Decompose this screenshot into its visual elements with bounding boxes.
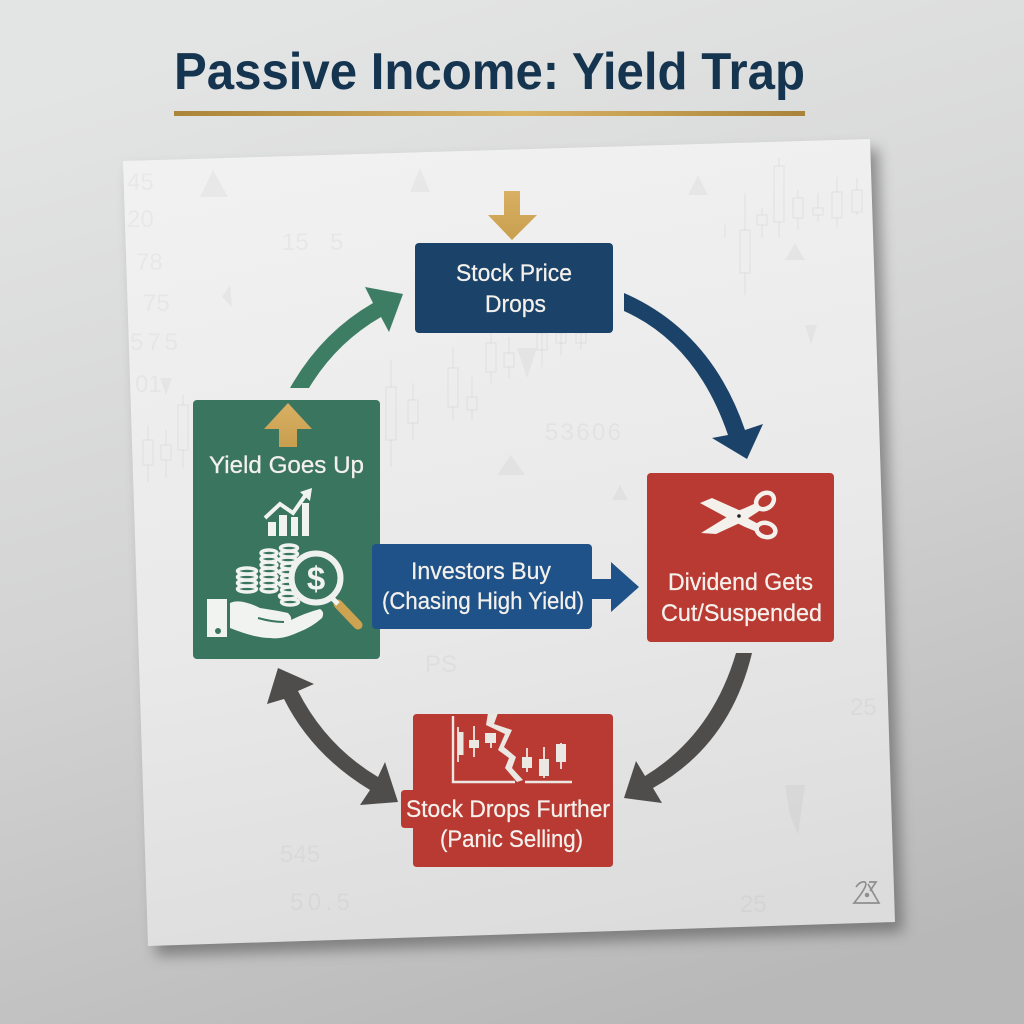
box text: stock drops further: Stock Drops Further	[406, 796, 610, 823]
watermark numbers: 50.5	[290, 889, 350, 916]
gold arrow: up	[264, 403, 312, 447]
box text: yield goes up: Yield Goes Up	[209, 452, 364, 479]
icon: open hand	[207, 599, 323, 638]
arrow: dark grey, dividend to stock drops	[624, 653, 752, 803]
arrow: navy, stock price to dividend	[624, 293, 763, 459]
paper panel	[123, 139, 895, 946]
watermark: faint market chart background	[127, 158, 877, 918]
box text: dividend gets cut: Dividend Gets	[668, 569, 813, 596]
watermark numbers: 20	[127, 206, 154, 233]
box: stock price drops	[415, 243, 613, 333]
box: dividend gets cut	[647, 473, 834, 642]
watermark candlesticks	[143, 158, 862, 482]
title: Passive Income: Yield Trap	[174, 43, 805, 101]
watermark numbers: 78	[136, 249, 163, 276]
icon: scissors	[700, 489, 777, 539]
title underline	[174, 111, 805, 116]
watermark numbers: 75	[143, 290, 170, 317]
icon: magnifying glass with dollar sign: $	[307, 560, 325, 597]
watermark numbers: 45	[127, 169, 154, 196]
box: stock drops further	[401, 713, 613, 867]
watermark numbers: 5	[330, 229, 343, 256]
box text: stock price drops: Drops	[485, 291, 546, 318]
watermark numbers: 53606	[545, 419, 621, 446]
box text: dividend gets cut: Cut/Suspended	[661, 600, 822, 627]
watermark numbers: PS	[425, 651, 457, 678]
watermark numbers	[127, 169, 877, 918]
box text: stock drops further: (Panic Selling)	[440, 826, 583, 853]
icon: magnifying glass with dollar sign	[292, 554, 358, 625]
watermark numbers: 25	[740, 891, 767, 918]
watermark numbers: 01	[135, 371, 162, 398]
paper shadow	[131, 149, 903, 956]
box text: investors buy: Investors Buy	[411, 558, 551, 585]
arrow: green, yield to stock price	[290, 287, 403, 388]
icon: coin stacks	[238, 545, 298, 605]
box: investors buy	[372, 544, 639, 629]
watermark numbers: 15	[282, 229, 309, 256]
watermark triangles	[160, 168, 817, 835]
box text: investors buy: (Chasing High Yield)	[382, 588, 584, 615]
arrow: dark grey double-headed, stock drops and yield	[267, 668, 398, 805]
gold arrow: down into stock price box	[488, 191, 537, 240]
box text: stock price drops: Stock Price	[456, 260, 572, 287]
icon: corner logo mark	[854, 882, 879, 903]
box: yield goes up	[193, 400, 380, 659]
watermark numbers: 575	[130, 329, 178, 356]
watermark numbers: 25	[850, 694, 877, 721]
watermark numbers: 545	[280, 841, 320, 868]
icon: rising bar chart	[265, 488, 312, 536]
icon: cracked candlestick chart	[453, 713, 572, 782]
arrow: blue, investors buy to dividend	[590, 562, 639, 612]
